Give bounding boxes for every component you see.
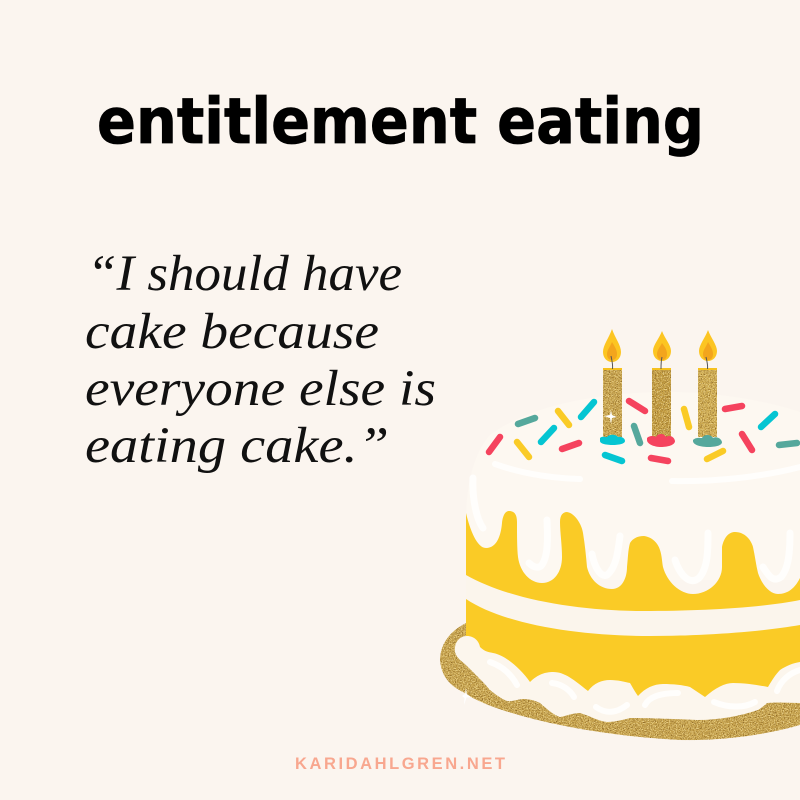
bottom icing [455, 636, 800, 722]
icing drip highlights [473, 478, 790, 581]
quote text [85, 246, 436, 474]
website footer: KARIDAHLGREN.NET [295, 755, 505, 773]
plate sparkle [462, 688, 471, 705]
top icing highlights [495, 464, 800, 481]
quote text: cake because [85, 304, 379, 360]
illustration: birthday cake [440, 329, 800, 740]
quote text: “I should have [87, 246, 402, 302]
cake plate [440, 623, 800, 740]
quote text: eating cake.” [85, 418, 389, 474]
quote text: everyone else is [85, 361, 436, 417]
sprinkles [489, 401, 797, 461]
candle 1 [600, 329, 625, 445]
candle 3 [693, 330, 722, 447]
yellow cake body [466, 511, 800, 708]
cream band [466, 575, 800, 636]
cake top icing [466, 392, 800, 580]
candle 2 [647, 331, 675, 447]
bottom icing highlights [490, 662, 800, 712]
title: entitlement eating [97, 85, 704, 158]
